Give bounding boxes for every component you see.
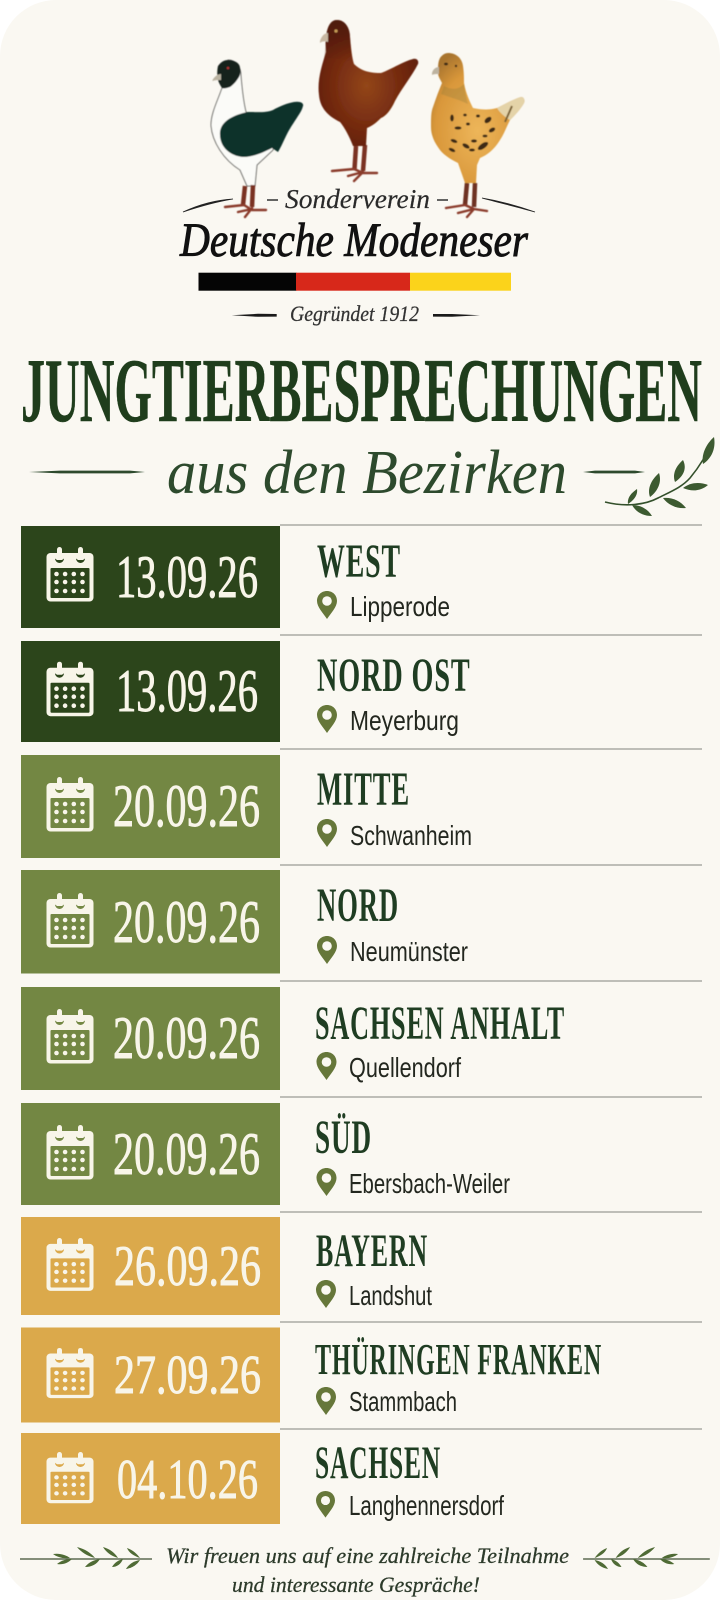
club name: Deutsche Modeneser: Deutsche Modeneser xyxy=(179,214,528,267)
icon: calendar xyxy=(46,1452,94,1503)
date: 27.09.26 xyxy=(114,1344,261,1405)
row: Thüringen Franken xyxy=(21,1322,702,1422)
subtitle text: aus den Bezirken xyxy=(167,439,567,507)
location: Ebersbach-Weiler xyxy=(349,1168,510,1199)
icon: calendar xyxy=(46,777,94,832)
region name: SÜD xyxy=(315,1111,372,1164)
date badge xyxy=(21,755,280,858)
row: Nord xyxy=(21,865,702,974)
icon: right sprig xyxy=(583,1547,710,1569)
icon: calendar xyxy=(46,1009,94,1064)
date badge xyxy=(21,641,280,742)
flag stripe xyxy=(198,273,511,291)
row: West xyxy=(21,525,702,628)
date badge xyxy=(21,1433,280,1524)
closing message line 2: und interessante Gespräche! xyxy=(232,1572,480,1597)
date: 04.10.26 xyxy=(117,1449,258,1511)
date badge xyxy=(21,1328,280,1422)
region name: NORD xyxy=(317,879,399,932)
icon: calendar xyxy=(46,1125,94,1180)
decorative arcs beside the feet xyxy=(183,198,535,212)
row: Sachsen xyxy=(21,1429,702,1524)
schedule table xyxy=(21,525,702,1524)
icon: calendar xyxy=(46,662,94,716)
location pin xyxy=(316,1052,336,1080)
location: Lipperode xyxy=(350,591,450,622)
location pin xyxy=(316,1387,336,1415)
date badge xyxy=(21,1103,280,1205)
date: 20.09.26 xyxy=(113,1005,260,1071)
row: Nord Ost xyxy=(21,635,702,742)
icon: calendar xyxy=(46,547,94,602)
date: 13.09.26 xyxy=(116,658,258,724)
club name: Sonderverein: Sonderverein xyxy=(285,184,430,214)
icon: calendar xyxy=(46,893,94,948)
location pin xyxy=(317,705,337,733)
location pin xyxy=(317,591,337,619)
location: Schwanheim xyxy=(350,820,472,851)
location pin xyxy=(317,819,337,847)
region name: WEST xyxy=(317,535,401,588)
logo xyxy=(179,20,535,326)
location: Landshut xyxy=(349,1280,432,1311)
date badge xyxy=(21,526,280,628)
illustration: golden spotted pigeon xyxy=(431,53,524,217)
location: Meyerburg xyxy=(350,705,459,736)
location: Quellendorf xyxy=(349,1052,461,1083)
row: Süd xyxy=(21,1097,702,1205)
date: 13.09.26 xyxy=(116,544,258,610)
date: 20.09.26 xyxy=(113,773,260,839)
location: Langhennersdorf xyxy=(349,1490,504,1521)
date badge xyxy=(21,870,280,974)
region name: SACHSEN xyxy=(315,1437,441,1489)
location pin xyxy=(317,936,337,964)
location: Neumünster xyxy=(350,936,468,967)
icon: calendar xyxy=(46,1348,94,1398)
icon: calendar xyxy=(46,1238,94,1291)
location: Stammbach xyxy=(349,1386,457,1417)
date: 20.09.26 xyxy=(113,889,260,955)
icon: olive branch xyxy=(605,437,715,516)
region name: NORD OST xyxy=(317,649,471,702)
icon: left sprig xyxy=(20,1547,152,1569)
date badge xyxy=(21,1217,280,1315)
region name: BAYERN xyxy=(316,1225,428,1277)
date badge xyxy=(21,987,280,1090)
closing message line 1: Wir freuen uns auf eine zahlreiche Teilnahme xyxy=(166,1543,569,1568)
founded line xyxy=(232,301,480,326)
footer xyxy=(20,1543,710,1597)
illustration: white and black pigeon xyxy=(211,60,303,217)
illustration: red pigeon xyxy=(319,20,418,181)
row: Mitte xyxy=(21,749,702,858)
location pin xyxy=(316,1168,336,1196)
region name: MITTE xyxy=(317,763,410,816)
founded line: Gegründet 1912 xyxy=(290,301,419,326)
row: Sachsen Anhalt xyxy=(21,981,702,1090)
location pin xyxy=(316,1280,336,1308)
subtitle with lines and branch xyxy=(29,437,715,516)
date: 26.09.26 xyxy=(114,1235,261,1298)
date: 20.09.26 xyxy=(113,1121,260,1187)
row: Bayern xyxy=(21,1212,702,1315)
location pin xyxy=(316,1491,335,1518)
